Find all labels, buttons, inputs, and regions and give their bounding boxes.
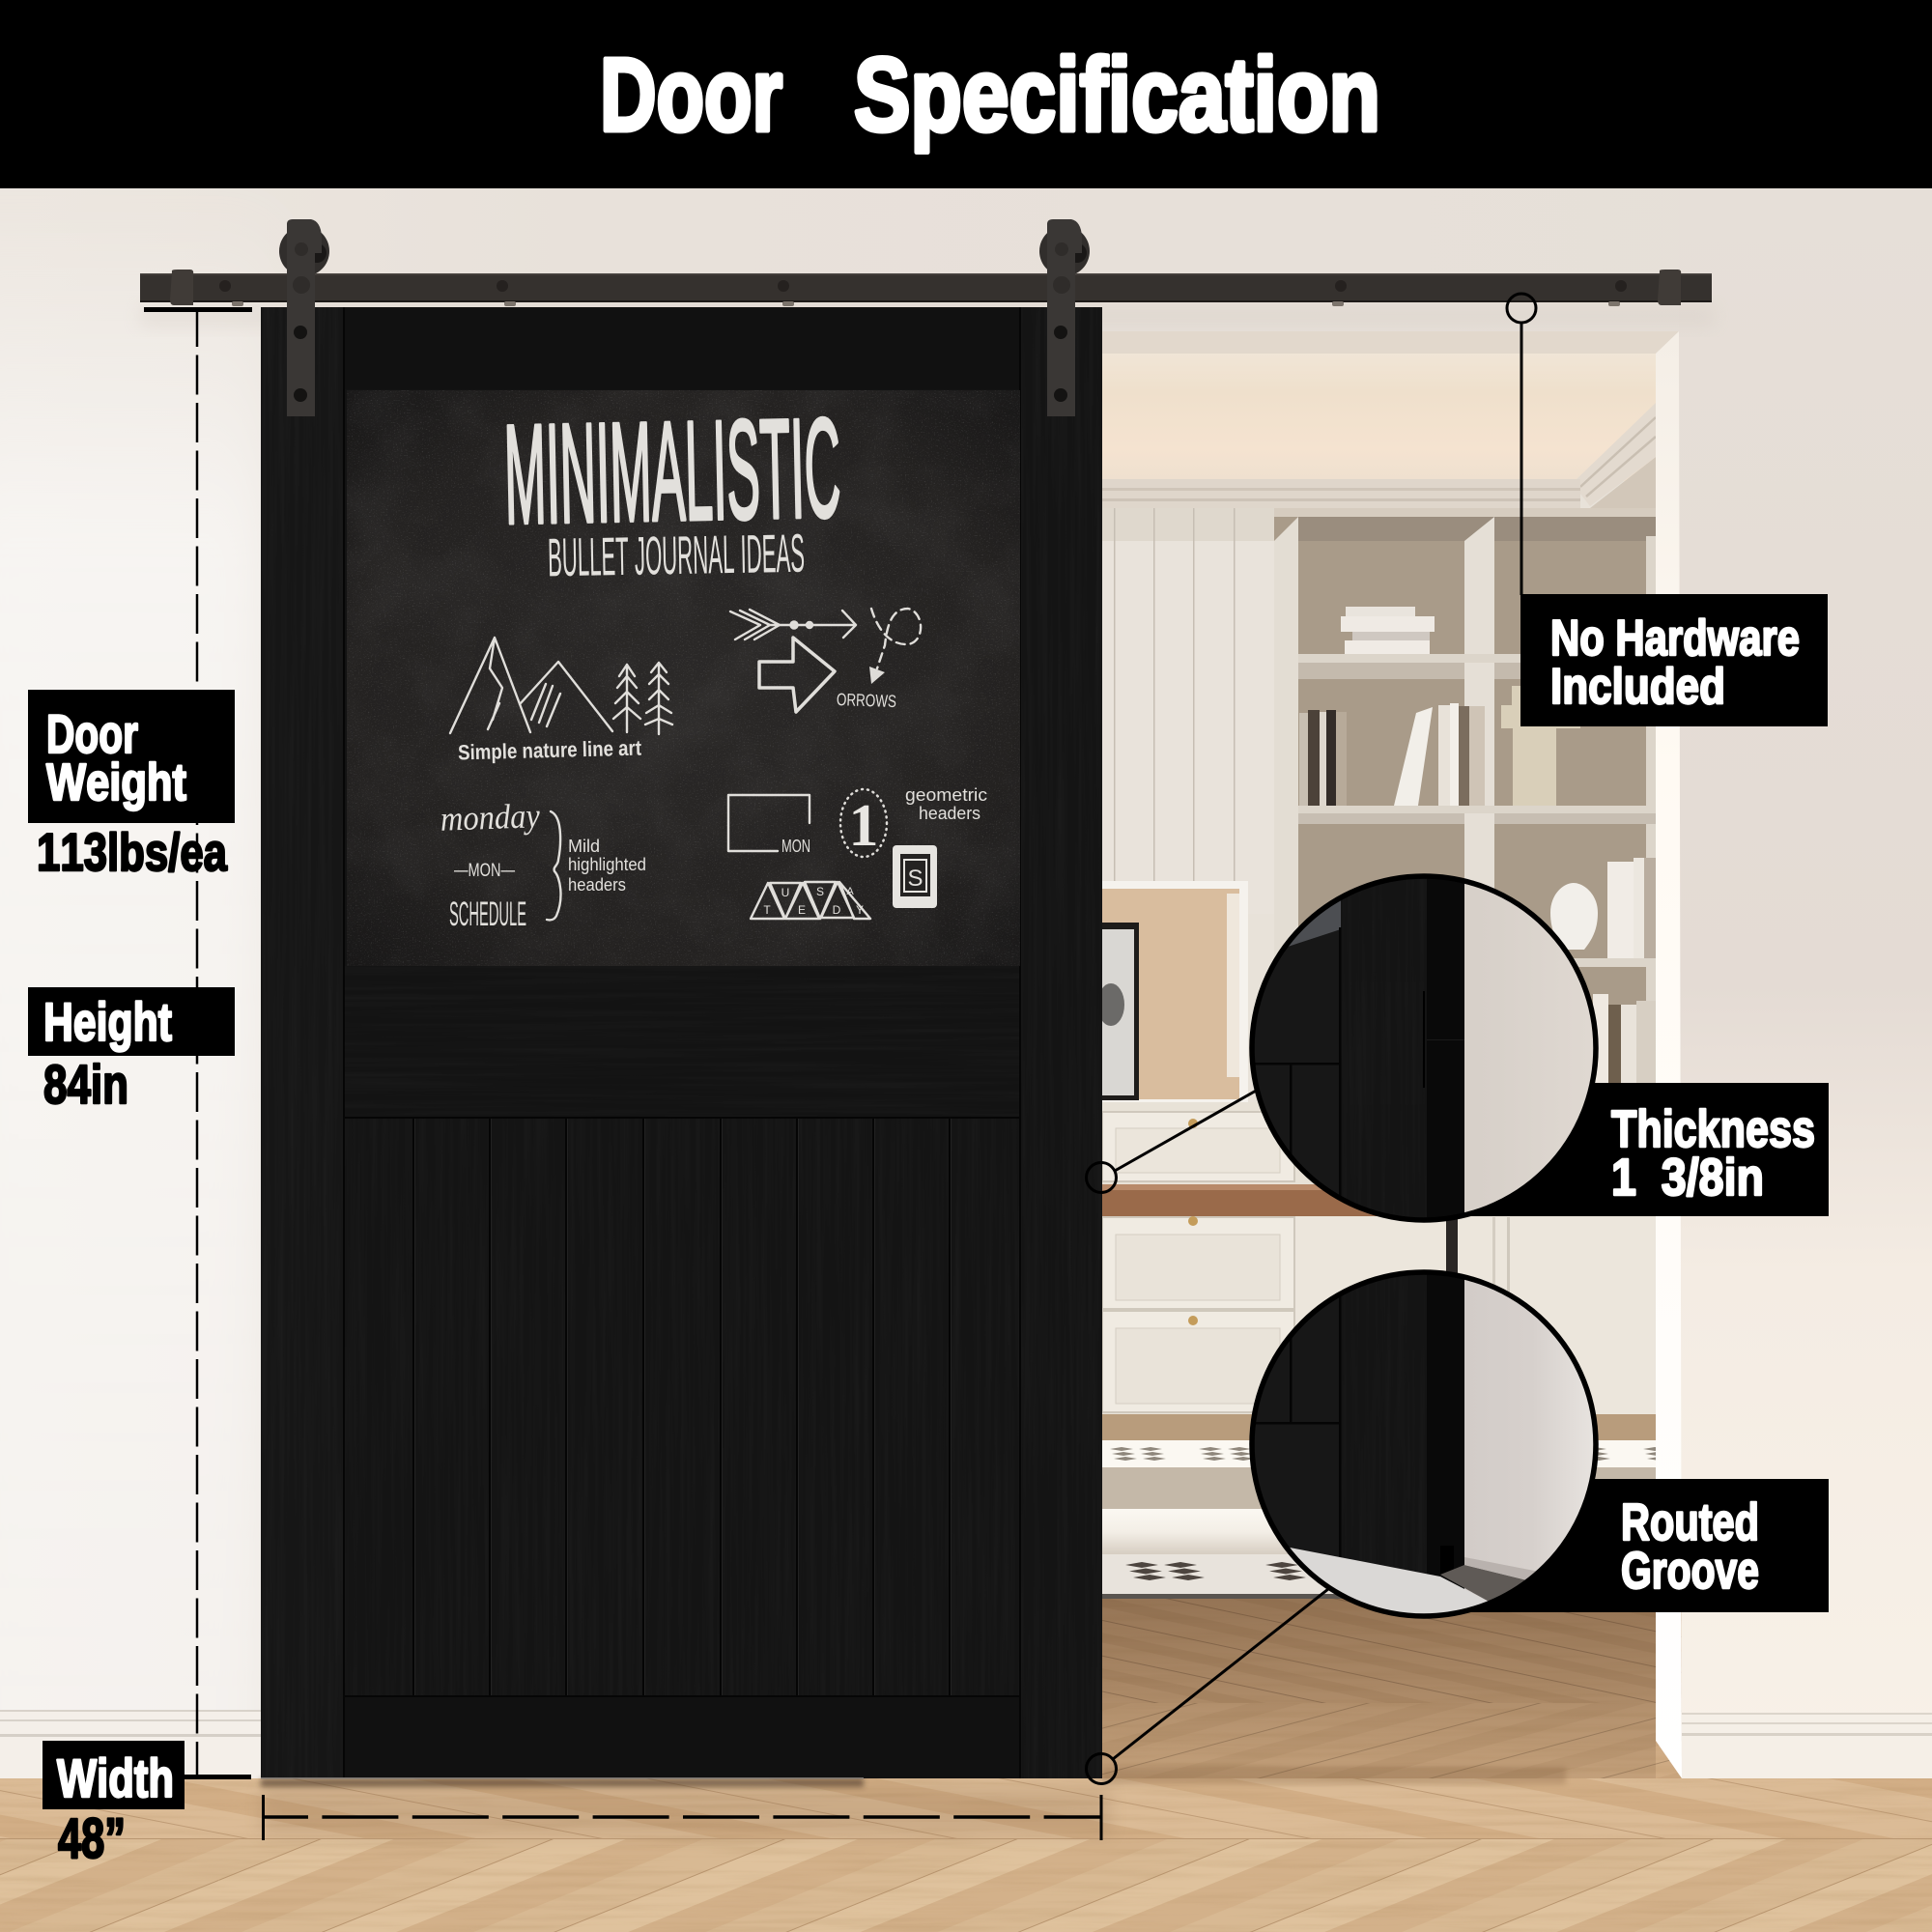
chalk: block arrow: [759, 638, 835, 712]
chalk: trees: [613, 663, 672, 734]
header band: [0, 0, 1932, 188]
chalkboard panel: [347, 388, 1020, 966]
detail circle: routed groove: [1246, 1265, 1604, 1633]
chalk: S badge: S: [907, 866, 923, 892]
label: no hardware included: Included: [1550, 659, 1725, 715]
label: door weight: Door: [46, 703, 138, 764]
chalk: dotted number: 1: [848, 793, 879, 859]
label: routed groove: [1449, 1479, 1829, 1612]
label: door weight: [28, 690, 235, 823]
hardware: wheels behind rail: [279, 226, 1090, 276]
value: width: 48”: [58, 1807, 126, 1870]
label: routed groove: Routed: [1621, 1493, 1759, 1551]
chalk: box label: MON: [781, 837, 810, 856]
chalk label: mild highlighted headers: headers: [568, 875, 626, 895]
paneled wall: [1102, 508, 1295, 914]
label: width: [43, 1741, 185, 1809]
floor: herringbone wood: [0, 1599, 1932, 1932]
bookcase: [1274, 508, 1656, 1126]
chalk: mountains: [450, 638, 612, 733]
hardware: right strap: [1047, 219, 1082, 416]
label: thickness: Thickness: [1611, 1100, 1815, 1158]
chalk label: geometric headers: geometric: [905, 785, 987, 805]
chalk: tuesday banner: Y: [856, 903, 864, 917]
label: height: Height: [43, 991, 172, 1052]
title: [600, 36, 1380, 153]
label: no hardware included: [1520, 594, 1828, 726]
baseboard: right: [1681, 1713, 1932, 1778]
chalkboard panel: SCHEDULE: [449, 895, 526, 933]
label: thickness: [1449, 1083, 1829, 1216]
label: routed groove: Groove: [1621, 1542, 1759, 1600]
chalk: tuesday banner: U: [781, 886, 789, 899]
scene: room seen through doorway: [1097, 354, 1656, 1609]
chalk: tuesday banner: A: [846, 886, 854, 897]
cabinets and desk: [1102, 1102, 1656, 1421]
label: no hardware included: No Hardware: [1550, 611, 1800, 667]
chalk: arrow: [730, 610, 856, 639]
chalk: arrowhead: [869, 667, 885, 684]
chalk: tuesday banner: E: [798, 903, 806, 917]
chalk: brace: [547, 811, 560, 920]
callout: no hardware leader: [1507, 294, 1536, 595]
chalk: S badge: [893, 845, 937, 908]
lock rail: [345, 966, 1019, 1119]
label: thickness: 1 3/8in: [1611, 1149, 1764, 1207]
rug: [1102, 1414, 1656, 1600]
bottom rail: [261, 1695, 1019, 1779]
chalk label: geometric headers: headers: [919, 804, 980, 823]
hardware: track rail: [140, 273, 1712, 306]
label: door weight: Weight: [46, 753, 186, 811]
books: [1299, 607, 1656, 1092]
leader: routed groove: [1086, 1589, 1328, 1783]
chalk: tuesday banner: S: [816, 885, 824, 898]
doorway reveal: top and right jamb: [1102, 331, 1682, 1778]
chalk: header box: [728, 795, 810, 851]
leader: thickness: [1086, 1090, 1258, 1192]
chalk label: nature: Simple nature line art: [458, 736, 642, 765]
art frame: [1097, 881, 1248, 1102]
chalk: tuesday banner: [751, 882, 870, 919]
chalk label: mild highlighted headers: Mild: [568, 837, 600, 856]
chalk: tuesday banner: D: [833, 903, 841, 917]
hardware: left strap: [287, 219, 322, 416]
chalk label: mild highlighted headers: highlighted: [568, 855, 646, 874]
height dimension line: [144, 307, 252, 1779]
v-groove planks: [345, 1119, 1019, 1696]
chalkboard panel: MINIMALISTIC: [502, 388, 842, 554]
title: Specification: [854, 36, 1380, 153]
chalk: dotted number: [840, 789, 887, 859]
title: Door: [600, 36, 782, 153]
top rail: [345, 307, 1019, 389]
detail circle: door thickness: [1246, 869, 1604, 1228]
barn door: [261, 307, 1102, 1779]
chalk: dashed loop arrow: [871, 609, 921, 668]
chalk label: mild highlighted headers: [568, 837, 646, 895]
value: height: 84in: [43, 1054, 128, 1116]
chalkboard panel: BULLET JOURNAL IDEAS: [547, 523, 806, 587]
chalk: mon: —MON—: [454, 861, 515, 881]
hardware: left stop: [170, 270, 193, 305]
hardware: right stop: [1658, 270, 1681, 305]
label: width: Width: [57, 1747, 174, 1808]
chalk label: geometric headers: [905, 785, 987, 823]
crown moulding: [1102, 403, 1656, 512]
baseboard: left: [0, 1710, 261, 1778]
value: door weight: 113lbs/ea: [37, 822, 227, 882]
chalk: monday: monday: [440, 796, 540, 838]
chalk label: arrows: ORROWS: [837, 690, 896, 711]
chalk: tuesday banner: T: [763, 903, 771, 917]
door stiles: [261, 307, 1102, 1778]
width dimension line: [263, 1795, 1101, 1840]
